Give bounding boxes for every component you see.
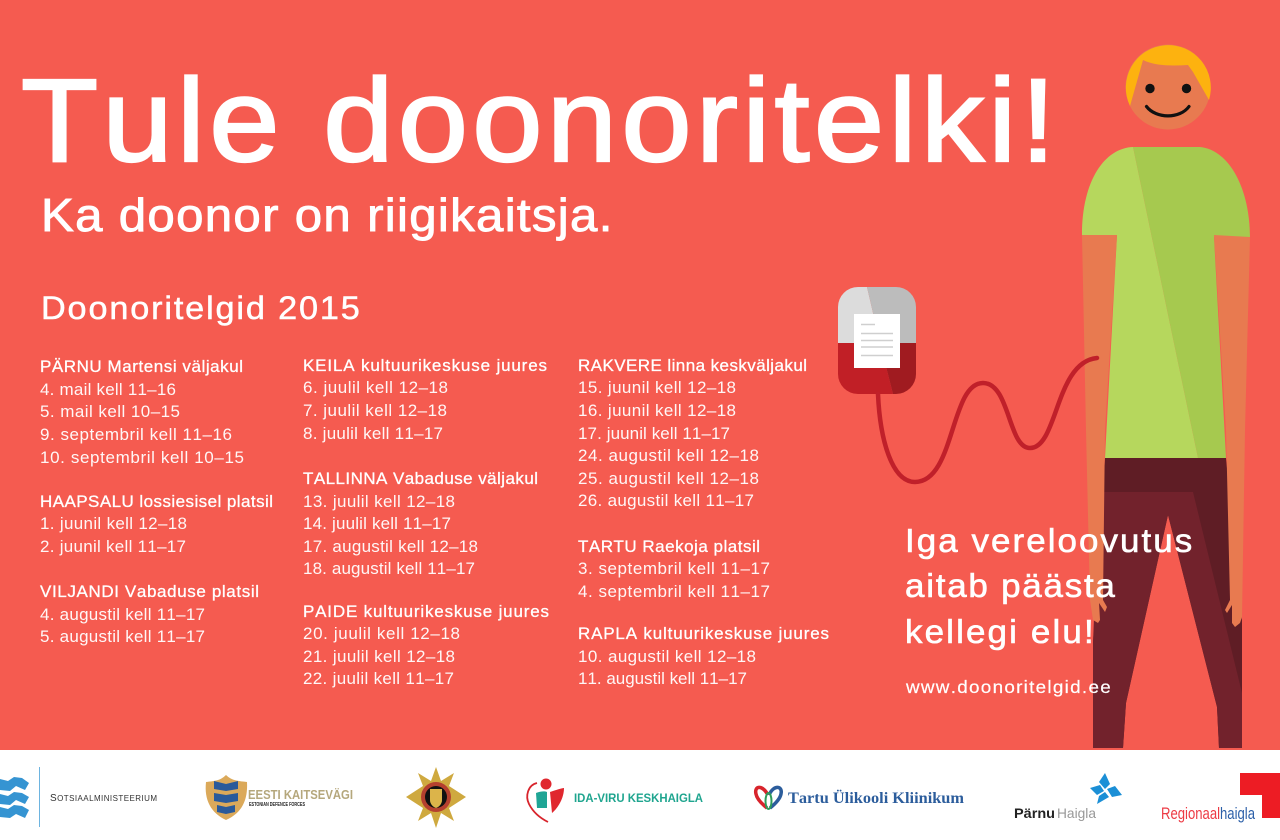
logo: Tartu Ülikooli Kliinikum: Tartu Ülikooli Kliinikum (788, 790, 964, 807)
venue: Rakvere: 15. juunil kell 12–18 (578, 378, 736, 397)
logo strip (0, 750, 1280, 840)
venue: Tallinn: TALLINNA Vabaduse väljakul (303, 469, 538, 488)
venue: Pärnu: 5. mail kell 10–15 (40, 402, 180, 421)
slogan: kellegi elu! (905, 614, 1094, 651)
logo: Eesti Kaitsevägi: ESTONIAN DEFENCE FORCES (249, 802, 306, 808)
venue: Haapsalu: HAAPSALU lossiesisel platsil (40, 492, 273, 511)
venue: Tartu: 4. septembril kell 11–17 (578, 582, 770, 601)
logo: Sotsiaalministeerium (0, 767, 157, 827)
venue: Haapsalu (40, 492, 273, 556)
venue: Pärnu: 4. mail kell 11–16 (40, 380, 176, 399)
venue: Rakvere: 24. augustil kell 12–18 (578, 446, 759, 465)
schedule column 1 (40, 357, 273, 646)
logo: Ida-Viru Keskhaigla (527, 778, 703, 822)
illustration: donor figure (1082, 44, 1250, 748)
logo: Pärnu Haigla: Pärnu (1014, 805, 1055, 821)
venue: Haapsalu: 1. juunil kell 12–18 (40, 514, 187, 533)
subtitle: Ka doonor on riigikaitsja. (41, 190, 612, 242)
venue: Paide: PAIDE kultuurikeskuse juures (303, 602, 549, 621)
logo: Pärnu Haigla: Haigla (1057, 805, 1096, 821)
venue: Viljandi: VILJANDI Vabaduse platsil (40, 582, 259, 601)
logo: Ida-Viru Keskhaigla: IDA-VIRU KESKHAIGLA (574, 793, 703, 805)
venue: Tartu: TARTU Raekoja platsil (578, 537, 760, 556)
title: Tule doonoritelki! (21, 54, 1056, 186)
venue: Paide (303, 602, 549, 688)
venue: Rapla (578, 624, 829, 688)
venue: Rakvere: 25. augustil kell 12–18 (578, 469, 759, 488)
venue: Paide: 21. juulil kell 12–18 (303, 647, 455, 666)
left arm (1082, 235, 1117, 623)
venue: Tallinn: 14. juulil kell 11–17 (303, 514, 451, 533)
venue: Tallinn: 13. juulil kell 12–18 (303, 492, 455, 511)
logo: Tartu Ülikooli Kliinikum (756, 787, 964, 809)
venue: Keila: 8. juulil kell 11–17 (303, 424, 443, 443)
venue: Keila: 7. juulil kell 12–18 (303, 401, 447, 420)
venue: Pärnu: PÄRNU Martensi väljakul (40, 357, 243, 376)
right arm (1214, 235, 1250, 627)
logo: Sotsiaalministeerium: SOTSIAALMINISTEERIUM (50, 793, 157, 804)
head (1126, 44, 1211, 130)
venue: Keila: KEILA kultuurikeskuse juures (303, 356, 547, 375)
venue: Rapla: 11. augustil kell 11–17 (578, 669, 747, 688)
venue: Tallinn (303, 469, 538, 578)
venue: Paide: 22. juulil kell 11–17 (303, 669, 454, 688)
venue: Rakvere: 16. juunil kell 12–18 (578, 401, 736, 420)
venue: Viljandi: 4. augustil kell 11–17 (40, 605, 205, 624)
venue: Keila (303, 356, 547, 443)
icon: blood bag (838, 287, 916, 394)
logo: rescue star badge (406, 767, 466, 828)
shirt (1082, 147, 1250, 458)
slogan: aitab päästa (905, 568, 1115, 605)
venue: Haapsalu: 2. juunil kell 11–17 (40, 537, 186, 556)
bag label (854, 314, 900, 368)
blood tube (878, 358, 1097, 482)
schedule column 3 (578, 356, 829, 688)
venue: Rakvere: RAKVERE linna keskväljakul (578, 356, 807, 375)
venue: Rakvere: 17. juunil kell 11–17 (578, 424, 730, 443)
website: www.doonoritelgid.ee (905, 676, 1111, 697)
venue: Tallinn: 18. augustil kell 11–17 (303, 559, 475, 578)
schedule heading: Doonoritelgid 2015 (41, 291, 360, 327)
venue: Tartu: 3. septembril kell 11–17 (578, 559, 770, 578)
venue: Tartu (578, 537, 770, 601)
schedule column 2 (303, 356, 549, 688)
trousers (1093, 458, 1242, 748)
venue: Viljandi: 5. augustil kell 11–17 (40, 627, 205, 646)
venue: Keila: 6. juulil kell 12–18 (303, 378, 448, 397)
venue: Paide: 20. juulil kell 12–18 (303, 624, 460, 643)
venue: Pärnu (40, 357, 244, 467)
slogan (905, 523, 1192, 651)
logo: Regionaalhaigla (1161, 773, 1280, 823)
slogan: Iga vereloovutus (905, 523, 1192, 560)
venue: Rapla: 10. augustil kell 12–18 (578, 647, 756, 666)
logo: Eesti Kaitsevägi (206, 775, 353, 820)
venue: Rakvere: 26. augustil kell 11–17 (578, 491, 754, 510)
venue: Rakvere (578, 356, 807, 510)
logo: Regionaalhaigla: Regionaalhaigla (1161, 804, 1255, 823)
venue: Tallinn: 17. augustil kell 12–18 (303, 537, 478, 556)
logo: Eesti Kaitsevägi: EESTI KAITSEVÄGI (248, 787, 353, 802)
logo: Pärnu Haigla (1014, 773, 1122, 821)
venue: Viljandi (40, 582, 259, 646)
venue: Pärnu: 9. septembril kell 11–16 (40, 425, 232, 444)
venue: Pärnu: 10. septembril kell 10–15 (40, 448, 244, 467)
venue: Rapla: RAPLA kultuurikeskuse juures (578, 624, 829, 643)
